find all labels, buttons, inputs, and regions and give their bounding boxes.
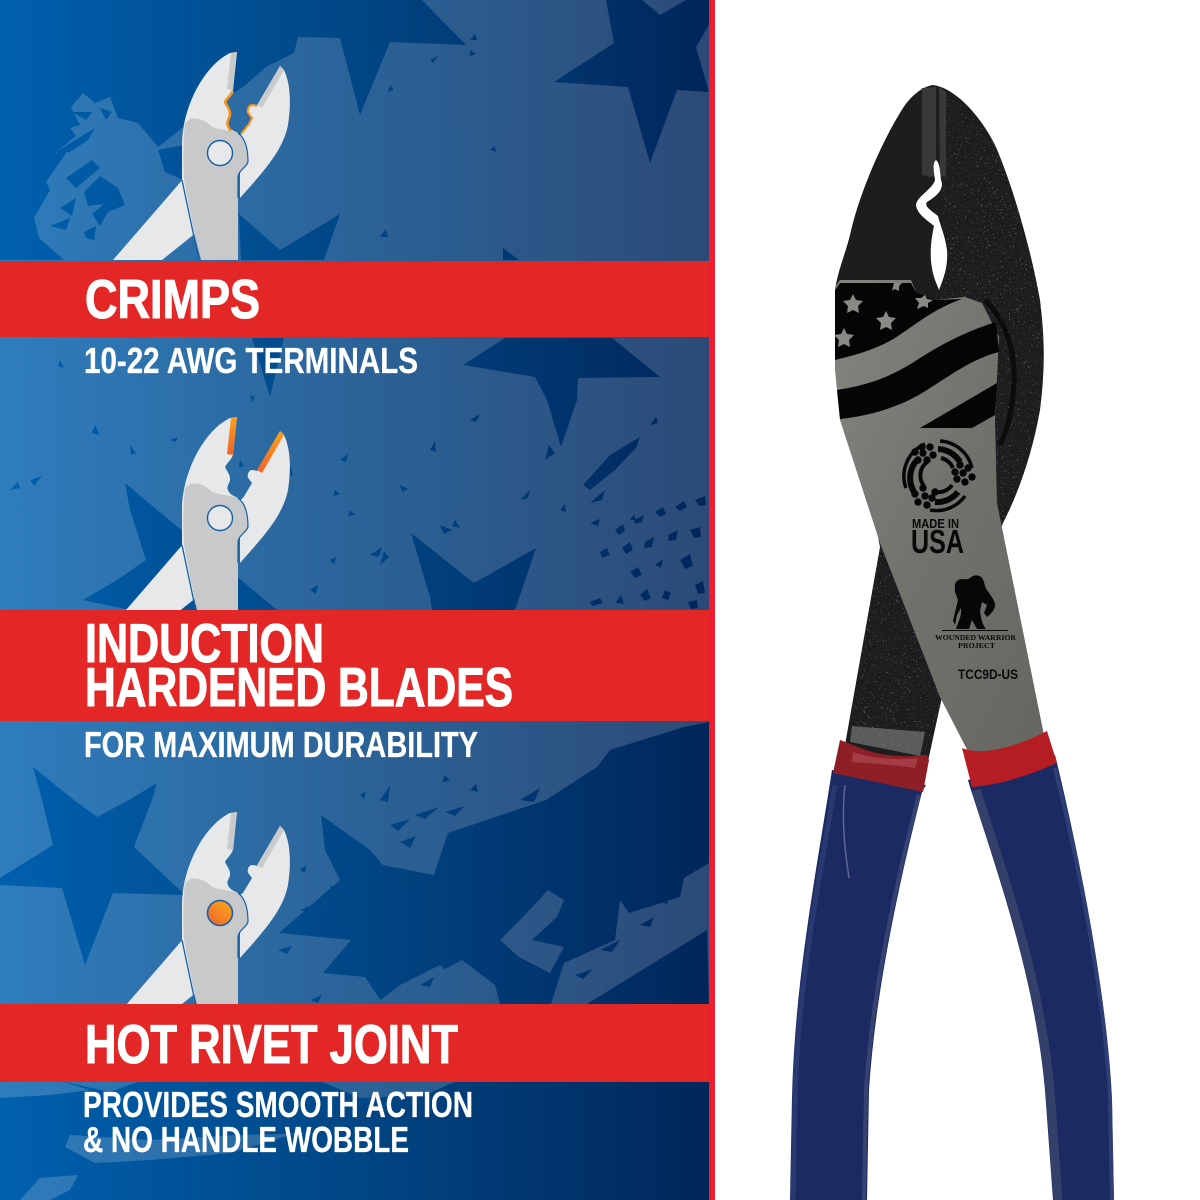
brush shards	[390, 806, 669, 989]
red band: induction hardened blades	[0, 610, 709, 721]
text: smooth action: PROVIDES SMOOTH ACTION	[83, 1084, 473, 1125]
left collar highlight	[852, 752, 918, 768]
text: smooth action: & NO HANDLE WOBBLE	[83, 1119, 409, 1160]
front steel blade	[835, 280, 1046, 765]
icon: pliers with orange hot rivet	[113, 812, 290, 1020]
jaw grain	[848, 95, 1044, 757]
red band: hot rivet joint	[0, 1004, 709, 1082]
text: model number: TCC9D-US	[958, 666, 1018, 682]
text: wounded warrior project: PROJECT	[958, 641, 995, 650]
middle left star	[83, 483, 277, 610]
top right star	[554, 0, 709, 163]
text: made in: MADE IN	[912, 516, 959, 531]
flag graphic	[835, 283, 999, 428]
star fragments	[252, 248, 660, 447]
crease shading around rivet	[985, 300, 1014, 445]
icon: soldier silhouette	[953, 575, 995, 629]
vertical red divider	[709, 0, 715, 1200]
panel: product photo of pliers	[790, 85, 1114, 1200]
rear black jaw and arm	[835, 85, 1044, 775]
text: wounded warrior project: WOUNDED WARRIOR	[935, 633, 1017, 642]
text: usa: USA	[911, 523, 964, 560]
heading: induction hardened blades: INDUCTION	[85, 612, 324, 674]
heading: induction hardened blades	[85, 612, 513, 718]
heading: crimps: CRIMPS	[85, 268, 260, 330]
text: wounded warrior project	[935, 633, 1017, 650]
text: smooth action	[83, 1084, 473, 1160]
lower dark field	[0, 1081, 709, 1200]
icon: pliers with orange crimping jaws	[113, 52, 290, 260]
crimp slot	[922, 87, 946, 177]
shiny worn patch above collar	[850, 726, 925, 756]
icon: pliers with orange blades	[113, 417, 290, 625]
lighter islands	[375, 800, 564, 1004]
flag stars	[834, 283, 933, 347]
orange crimp edges	[225, 91, 233, 131]
red band: crimps	[0, 261, 709, 337]
text: durability: FOR MAXIMUM DURABILITY	[84, 724, 478, 765]
left handle collar	[833, 740, 929, 792]
middle star	[411, 533, 536, 610]
panel: blue distressed flag background	[0, 0, 709, 1200]
top-left dark region with star	[0, 0, 466, 260]
rule	[942, 630, 1008, 631]
heading: induction hardened blades: HARDENED BLADES	[85, 656, 513, 718]
jaw opening	[916, 160, 947, 290]
lower right dark field	[279, 722, 709, 1004]
speckle texture	[10, 34, 706, 1003]
heading: hot rivet joint: HOT RIVET JOINT	[85, 1013, 458, 1075]
brush patches	[50, 108, 183, 240]
text: terminals: 10-22 AWG TERMINALS	[84, 340, 418, 381]
right handle grip	[968, 755, 1114, 1200]
upper star tips	[239, 214, 340, 260]
lower left star	[0, 767, 185, 965]
lower light brush	[0, 1081, 457, 1200]
left handle grip	[790, 770, 926, 1200]
right handle collar	[962, 731, 1057, 787]
logo: wire strand ring	[904, 441, 976, 511]
